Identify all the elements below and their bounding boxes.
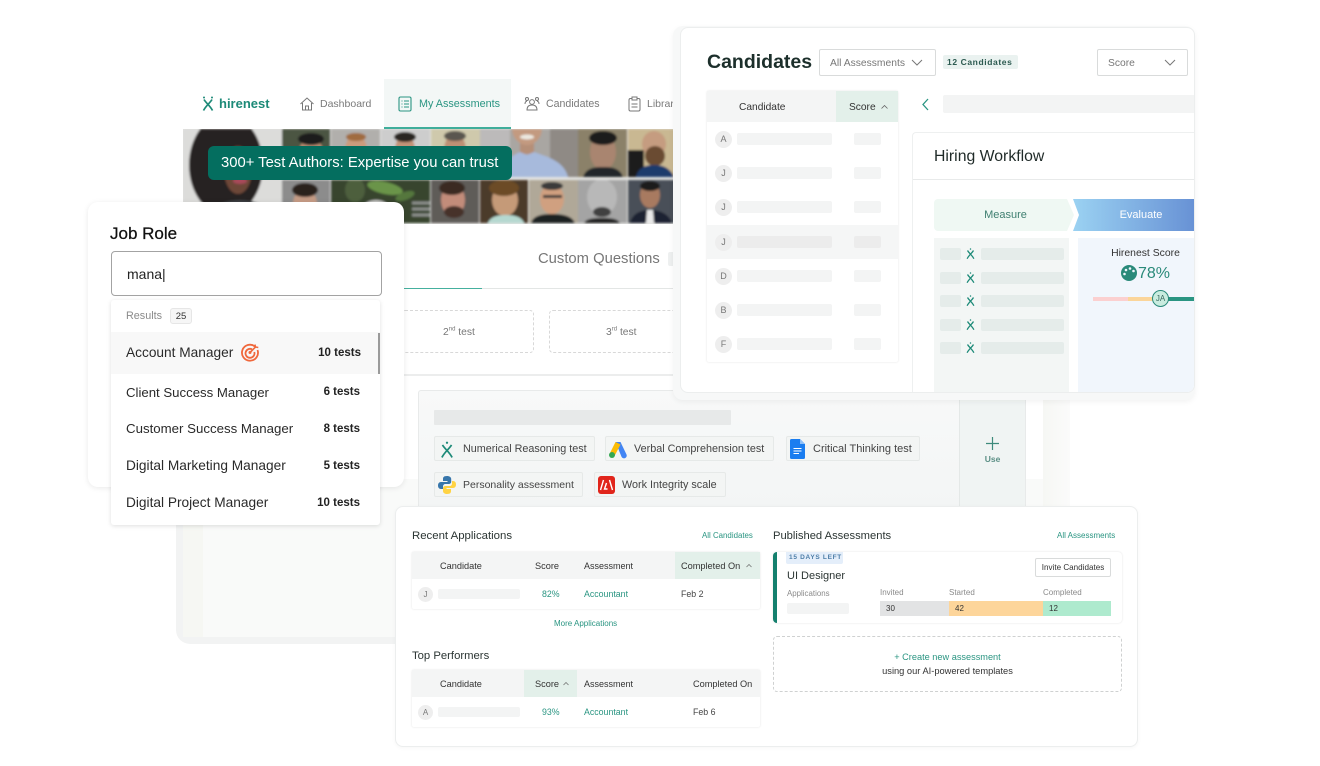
row F: F xyxy=(721,339,726,349)
value: Feb 6: Feb 6 xyxy=(693,707,716,717)
link: All Candidates: All Candidates xyxy=(702,531,753,540)
row D xyxy=(715,268,881,285)
avatar: A xyxy=(418,705,433,720)
tab count badge xyxy=(668,252,674,266)
tab label: My Assessments xyxy=(419,98,500,110)
avatar: J xyxy=(418,587,433,602)
row: Client Success Manager xyxy=(126,385,360,400)
logo: hirenest xyxy=(202,96,270,111)
chip text: Work Integrity scale xyxy=(622,479,717,491)
avatar: J: J xyxy=(424,590,428,599)
row 3 xyxy=(940,295,1064,307)
dropdown: Score xyxy=(1097,49,1188,76)
step label: Evaluate: Evaluate xyxy=(1120,209,1162,221)
nav: Library: Library xyxy=(647,98,679,110)
table: candidates list xyxy=(707,91,898,362)
bar: completed 12 xyxy=(1043,601,1111,616)
outer glow frame xyxy=(673,26,1195,400)
marker: JA xyxy=(1152,290,1169,307)
heading: Published Assessments: Published Assessments xyxy=(773,530,891,542)
slot: 2nd test: 2nd test xyxy=(443,327,475,338)
badge: 15 days left xyxy=(786,552,843,564)
panel: main assessments page xyxy=(176,400,1054,644)
row J xyxy=(715,199,881,216)
dropdown: All Assessments xyxy=(819,49,936,76)
badge: 12 Candidates xyxy=(943,55,1018,69)
column: Score sorted xyxy=(524,670,577,697)
row J: J xyxy=(721,202,726,212)
bar: started 42 xyxy=(949,601,1043,616)
panel: search results dropdown xyxy=(111,300,380,525)
lower page surface xyxy=(203,479,1043,637)
value: Accountant: Accountant xyxy=(584,589,628,599)
column: Score: Score xyxy=(535,561,559,571)
applications placeholder xyxy=(787,603,849,614)
column: Assessment: Assessment xyxy=(584,561,633,571)
results count badge: 25 xyxy=(176,311,186,322)
chip text: Personality assessment xyxy=(463,479,574,491)
row J: J xyxy=(721,168,726,178)
tab underline xyxy=(404,288,674,289)
banner: test authors: 300+ Test Authors: Expertise you can trust xyxy=(221,155,498,171)
label: Completed: Completed xyxy=(1043,588,1082,597)
dropdown text: Score xyxy=(1108,58,1135,69)
row 1 xyxy=(940,248,1064,260)
chip text: Numerical Reasoning test xyxy=(463,443,587,455)
marker: JA: JA xyxy=(1156,294,1165,303)
row B xyxy=(715,302,881,319)
row: Account Manager xyxy=(111,332,380,374)
value: 78%: 78% xyxy=(1138,265,1170,282)
test count: 6 tests xyxy=(324,386,360,398)
use column xyxy=(959,391,1025,507)
photo mosaic of test authors xyxy=(183,129,673,224)
table: top performers xyxy=(412,670,760,727)
icon: back chevron xyxy=(922,98,928,110)
button: Invite Candidates: Invite Candidates xyxy=(1042,563,1104,572)
icon: assessments list xyxy=(398,96,412,112)
test count: 5 tests xyxy=(324,460,360,472)
tabs section xyxy=(404,224,674,376)
row: Customer Success Manager xyxy=(126,421,360,436)
badge: 15 days left: 15 DAYS LEFT xyxy=(789,554,842,561)
row F xyxy=(715,336,881,353)
icon: target xyxy=(241,344,259,362)
table header xyxy=(412,552,760,579)
chip text: Critical Thinking test xyxy=(813,443,912,455)
panel: job role search xyxy=(88,202,404,487)
row 5 xyxy=(940,342,1064,354)
panel background frame xyxy=(176,409,1070,644)
row J highlighted xyxy=(721,236,881,248)
label: Hirenest Score: Hirenest Score xyxy=(1111,248,1180,259)
column: Completed On sorted xyxy=(675,552,760,579)
icon: blue document xyxy=(790,439,805,459)
table header xyxy=(707,91,898,122)
tab label: Custom Questions: Custom Questions xyxy=(538,251,660,267)
role name: Account Manager xyxy=(126,345,233,360)
results count badge xyxy=(170,308,192,324)
right gutter xyxy=(1043,390,1070,520)
button: Invite Candidates xyxy=(1035,558,1111,577)
active tab underline xyxy=(404,288,482,289)
row 4 xyxy=(940,319,1064,331)
role name: Customer Success Manager xyxy=(126,421,293,436)
panel: dashboard summary xyxy=(395,506,1138,747)
heading: Recent Applications: Recent Applications xyxy=(412,530,512,542)
input value: mana| xyxy=(127,266,166,282)
bar: started 42: 42 xyxy=(955,604,964,613)
banner: test authors xyxy=(208,146,512,180)
test count: 10 tests xyxy=(318,347,361,359)
panel: hiring workflow xyxy=(912,132,1202,402)
row D: D xyxy=(720,271,727,281)
page surface xyxy=(183,79,1043,637)
callout: create new assessment xyxy=(773,636,1122,692)
value: Feb 2: Feb 2 xyxy=(681,589,704,599)
card: UI Designer assessment xyxy=(773,552,1122,623)
icon: chevron xyxy=(1164,60,1176,66)
icon: hirenest mark xyxy=(441,442,453,458)
nav: Candidates: Candidates xyxy=(546,98,600,110)
step: Evaluate xyxy=(1073,199,1203,231)
icon: library clipboard xyxy=(628,96,640,112)
column: Completed On: Completed On xyxy=(693,679,752,689)
column: Score sorted: Score xyxy=(535,679,559,689)
role name: Digital Project Manager xyxy=(126,495,268,510)
link: create new assessment: + Create new assessment xyxy=(894,652,1001,662)
column: Candidate: Candidate xyxy=(440,561,482,571)
chip: Personality assessment xyxy=(434,472,583,497)
chip text: Verbal Comprehension test xyxy=(634,443,764,455)
table: recent applications xyxy=(412,552,760,609)
label: Invited: Invited xyxy=(880,588,904,597)
note: AI-powered templates: using our AI-powered templates xyxy=(882,666,1013,676)
template title placeholder xyxy=(434,410,731,425)
link: All Assessments: All Assessments xyxy=(1057,531,1115,540)
panel: template card xyxy=(418,390,1026,508)
bar: invited 30: 30 xyxy=(886,604,895,613)
column: Assessment: Assessment xyxy=(584,679,633,689)
column: hirenest score xyxy=(1078,238,1203,398)
row 2 xyxy=(940,272,1064,284)
badge: 12 Candidates: 12 Candidates xyxy=(947,57,1012,67)
column: measure results xyxy=(934,238,1069,398)
value: Accountant: Accountant xyxy=(584,707,628,717)
header divider xyxy=(913,179,1203,180)
icon: red adobe tile xyxy=(598,476,615,494)
search input xyxy=(111,251,382,296)
label: Started: Started xyxy=(949,588,975,597)
table header xyxy=(412,670,760,697)
step label: Measure: Measure xyxy=(984,209,1027,221)
row A xyxy=(715,131,881,148)
icon: score palette xyxy=(1121,265,1137,281)
highlighted row xyxy=(707,225,898,259)
active tab: My Assessments xyxy=(384,79,511,129)
label: Applications: Applications xyxy=(787,589,830,598)
link: More Applications: More Applications xyxy=(554,619,617,628)
row: Digital Project Manager xyxy=(126,495,360,510)
icon: hirenest mark xyxy=(202,96,214,111)
name placeholder xyxy=(438,589,520,599)
slot: 3rd test xyxy=(549,310,689,353)
heading: Candidates: Candidates xyxy=(707,51,812,73)
row J xyxy=(715,165,881,182)
column: Candidate: Candidate xyxy=(440,679,482,689)
section divider xyxy=(404,374,674,376)
icon: ads triangle logo xyxy=(609,442,627,458)
dropdown text: All Assessments xyxy=(830,58,905,69)
nav: Dashboard: Dashboard xyxy=(320,98,371,110)
score bar xyxy=(1093,297,1203,301)
column: Completed On sorted: Completed On xyxy=(681,561,740,571)
avatar: A: A xyxy=(423,708,428,717)
navigation bar xyxy=(183,79,683,129)
name placeholder xyxy=(438,707,520,717)
icon: chevron xyxy=(912,60,922,66)
candidate name placeholder xyxy=(943,95,1203,113)
results label: Results xyxy=(126,310,162,322)
role name: Digital Marketing Manager xyxy=(126,458,286,473)
row J highlighted: J xyxy=(721,237,726,247)
row B: B xyxy=(720,305,726,315)
icon: candidates people xyxy=(524,97,540,110)
test count: 8 tests xyxy=(324,423,360,435)
test count: 10 tests xyxy=(317,497,360,509)
step: Measure xyxy=(934,199,1074,231)
column: Score sorted xyxy=(836,91,898,122)
row A: A xyxy=(720,134,726,144)
left rail tint xyxy=(183,223,203,637)
value: 93%: 93% xyxy=(542,707,560,717)
title: UI Designer: UI Designer xyxy=(787,570,845,582)
row: Digital Marketing Manager xyxy=(126,458,360,473)
icon: python logo xyxy=(438,476,456,494)
role name: Client Success Manager xyxy=(126,385,269,400)
scrollbar thumb xyxy=(378,333,380,374)
slot: 2nd test xyxy=(401,310,534,353)
value: 82%: 82% xyxy=(542,589,560,599)
bar: completed 12: 12 xyxy=(1049,604,1058,613)
slot: 3rd test: 3rd test xyxy=(606,327,637,338)
label: Use: Use xyxy=(985,454,1000,464)
chip: Numerical Reasoning test xyxy=(434,436,595,461)
bar: invited 30 xyxy=(880,601,949,616)
icon: plus xyxy=(986,437,999,450)
icon: dashboard home xyxy=(300,98,314,110)
column: Score sorted: Score xyxy=(849,102,876,113)
chip: Critical Thinking test xyxy=(786,436,920,461)
panel: candidates xyxy=(673,27,1195,400)
chip: Verbal Comprehension test xyxy=(605,436,774,461)
heading: Hiring Workflow: Hiring Workflow xyxy=(934,148,1044,165)
heading: Top Performers: Top Performers xyxy=(412,650,489,662)
chip: Work Integrity scale xyxy=(594,472,726,497)
candidates surface xyxy=(680,27,1195,393)
wordmark: hirenest xyxy=(219,96,270,111)
heading: Job Role: Job Role xyxy=(110,224,177,243)
column: Candidate: Candidate xyxy=(739,102,785,113)
